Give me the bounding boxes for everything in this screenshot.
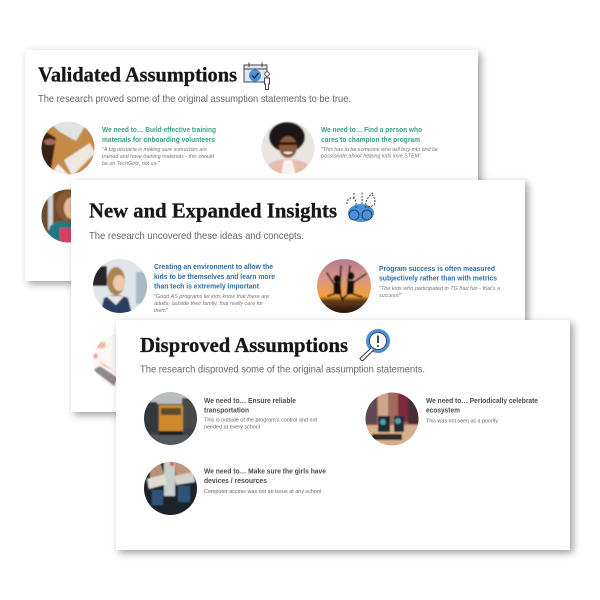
heading: ecosystem xyxy=(426,406,460,414)
photo: girl holding books xyxy=(42,190,71,242)
heading: We need to… Periodically celebrate xyxy=(426,396,538,405)
heading: We need to… Ensure reliable xyxy=(204,396,296,405)
quote: adults, outside their family, that really care for xyxy=(154,301,263,307)
item: devices xyxy=(143,461,326,517)
photo: smiling woman with curly hair xyxy=(262,122,314,174)
heading: materials for onboarding volunteers xyxy=(102,135,215,144)
photo: girls holding signs xyxy=(144,462,197,515)
panel: new and expanded insights xyxy=(71,180,525,412)
icon: calendar with check and presenter xyxy=(244,62,270,90)
quote: "Good AS programs let kids know that there are xyxy=(154,294,269,300)
description: This was not seen as a priority xyxy=(426,418,498,424)
quote: trained and have training materials - this should xyxy=(102,154,215,160)
photo: hands with calculator xyxy=(93,334,116,388)
quote: them" xyxy=(154,308,169,314)
panel: disproved assumptions xyxy=(116,320,570,550)
icon: magnifier with exclamation mark xyxy=(360,329,390,361)
quote: "The kids who participated in TG had fun - that's a xyxy=(379,286,500,292)
photo: colorful celebration xyxy=(366,392,418,446)
heading: We need to… Make sure the girls have xyxy=(204,466,326,476)
photo: girl at computer xyxy=(92,258,148,314)
quote: "A big obstacle is making sure instructors are xyxy=(102,147,207,153)
description: Computer access was not an issue at any school xyxy=(204,489,321,495)
item: training materials xyxy=(40,118,216,176)
title: validated assumptions: Validated Assumptions xyxy=(38,62,237,86)
item: champion xyxy=(260,120,438,176)
heading: subjectively rather than with metrics xyxy=(379,274,497,282)
heading: kids to be themselves and learn more xyxy=(154,272,275,281)
heading: than tech is extremely important xyxy=(154,282,259,290)
panel: validated assumptions xyxy=(25,50,478,281)
title: disproved assumptions: Disproved Assumptions xyxy=(140,333,348,357)
description: needed at every school xyxy=(204,424,260,430)
heading: We need to… Build effective training xyxy=(102,125,216,134)
subtitle: The research disproved some of the original assumption statements. xyxy=(140,364,425,376)
heading: transportation xyxy=(204,406,249,414)
quote: success!" xyxy=(379,293,403,299)
title: new and expanded insights: New and Expanded Insights xyxy=(89,198,337,222)
photo: jumping silhouettes at sunset xyxy=(316,258,372,314)
heading: devices / resources xyxy=(204,476,267,485)
heading: cares to champion the program xyxy=(321,135,420,144)
item: transportation xyxy=(143,391,318,447)
photo: open book on desk xyxy=(42,122,94,174)
quote: passionate about helping kids love STEM" xyxy=(320,154,422,160)
subtitle: The research uncovered these ideas and concepts. xyxy=(89,231,304,242)
description: This is outside of the program's control and not xyxy=(204,418,318,424)
item: program success xyxy=(316,258,500,314)
heading: Program success is often measured xyxy=(379,264,495,273)
item: environment xyxy=(92,258,275,314)
heading: Creating an environment to allow the xyxy=(154,262,273,271)
quote: "This has to be someone who will buy-into and be xyxy=(321,147,438,153)
icon: brain with dotted arrows xyxy=(347,192,375,222)
heading: We need to… Find a person who xyxy=(321,125,422,134)
item: celebrate ecosystem xyxy=(364,391,538,447)
subtitle: The research proved some of the original assumption statements to be true. xyxy=(38,94,351,105)
quote: be on TechGirlz, not us." xyxy=(102,161,161,167)
photo: school bus xyxy=(144,392,197,445)
